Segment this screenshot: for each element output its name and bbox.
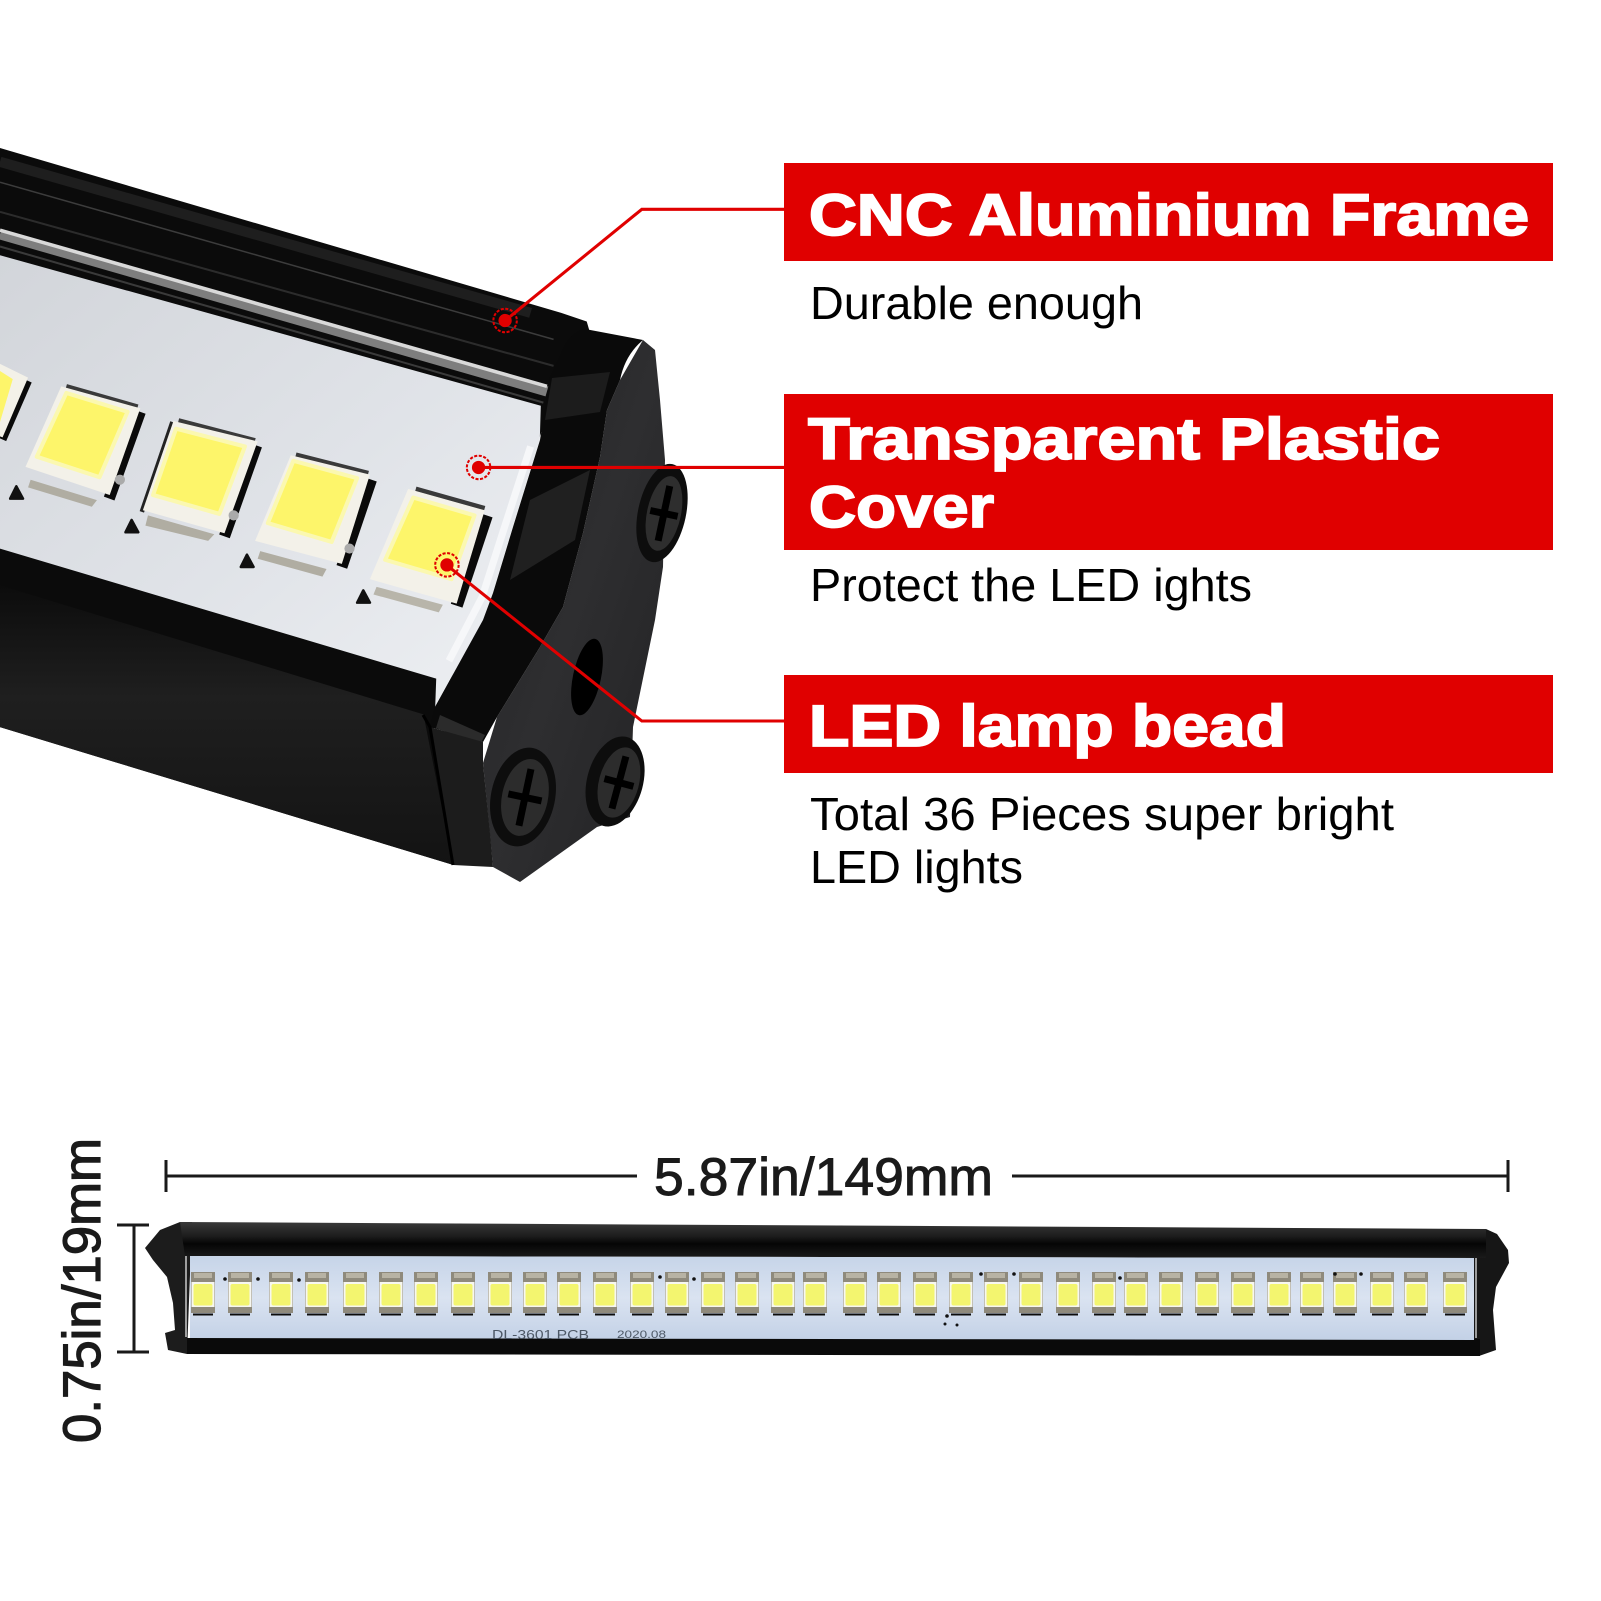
frame and lamp board bbox=[0, 148, 589, 865]
width dimension bbox=[166, 1148, 1508, 1207]
rim highlight upper bbox=[545, 372, 610, 420]
heading: LED lamp bead bbox=[809, 694, 1286, 759]
panel: LED lamp bead bbox=[784, 675, 1553, 893]
cover edge highlight bbox=[449, 447, 531, 661]
36 LED beads bbox=[191, 1272, 1467, 1316]
panel: CNC Aluminium Frame bbox=[784, 163, 1553, 329]
board specks bbox=[223, 1272, 1363, 1326]
LED bead 4 bbox=[241, 455, 371, 577]
callout line: cover bbox=[467, 456, 784, 479]
heading bar bbox=[784, 163, 1553, 261]
heading bar bbox=[784, 675, 1553, 773]
rim highlight middle bbox=[510, 470, 590, 580]
callout line: frame bbox=[493, 209, 784, 332]
panel: Transparent Plastic Cover bbox=[784, 394, 1553, 611]
cap lower section bbox=[430, 727, 493, 867]
heading line 1: Transparent Plastic bbox=[808, 407, 1440, 472]
description: Durable enough bbox=[810, 277, 1143, 329]
frame seam bbox=[423, 715, 453, 865]
screw top bbox=[628, 459, 696, 567]
description: Protect the LED ights bbox=[810, 559, 1252, 611]
lower frame face bbox=[0, 585, 453, 865]
heading line 2: Cover bbox=[809, 475, 994, 540]
LED bead 2 bbox=[10, 386, 140, 507]
aluminium frame body bbox=[0, 148, 589, 865]
frame top highlights bbox=[0, 162, 554, 403]
callout line: bead bbox=[435, 553, 784, 721]
board date: 2020.08 bbox=[617, 1329, 666, 1341]
right end cap bbox=[1470, 1229, 1509, 1356]
LED bead 3 bbox=[126, 421, 258, 541]
board edge highlights bbox=[186, 1256, 1476, 1338]
width label: 5.87in/149mm bbox=[654, 1148, 993, 1207]
height label: 0.75in/19mm bbox=[53, 1138, 112, 1443]
heading bar bbox=[784, 394, 1553, 550]
lamp board under transparent cover bbox=[0, 255, 541, 707]
left end cap bbox=[145, 1222, 200, 1354]
screw bottom left bbox=[481, 741, 565, 853]
heading: CNC Aluminium Frame bbox=[809, 183, 1529, 248]
LED bead 1 bbox=[0, 364, 28, 439]
height dimension bbox=[53, 1138, 149, 1443]
product close-up photo bbox=[0, 148, 696, 882]
description line 2: LED lights bbox=[810, 841, 1023, 893]
end cap mounting hole bbox=[565, 636, 609, 718]
description line 1: Total 36 Pieces super bright bbox=[810, 788, 1394, 840]
product front view bbox=[145, 1222, 1509, 1356]
rim highlight lower bbox=[436, 715, 485, 745]
lamp board bbox=[190, 1256, 1474, 1340]
LED bead 5 bbox=[357, 489, 487, 612]
end cap outer face bbox=[483, 340, 665, 882]
board print: DL-3601 PCB bbox=[492, 1327, 589, 1342]
screw bottom right bbox=[576, 730, 654, 833]
end cap glossy rim bbox=[430, 329, 643, 742]
top rail bbox=[180, 1222, 1486, 1258]
bottom rail bbox=[187, 1338, 1480, 1356]
